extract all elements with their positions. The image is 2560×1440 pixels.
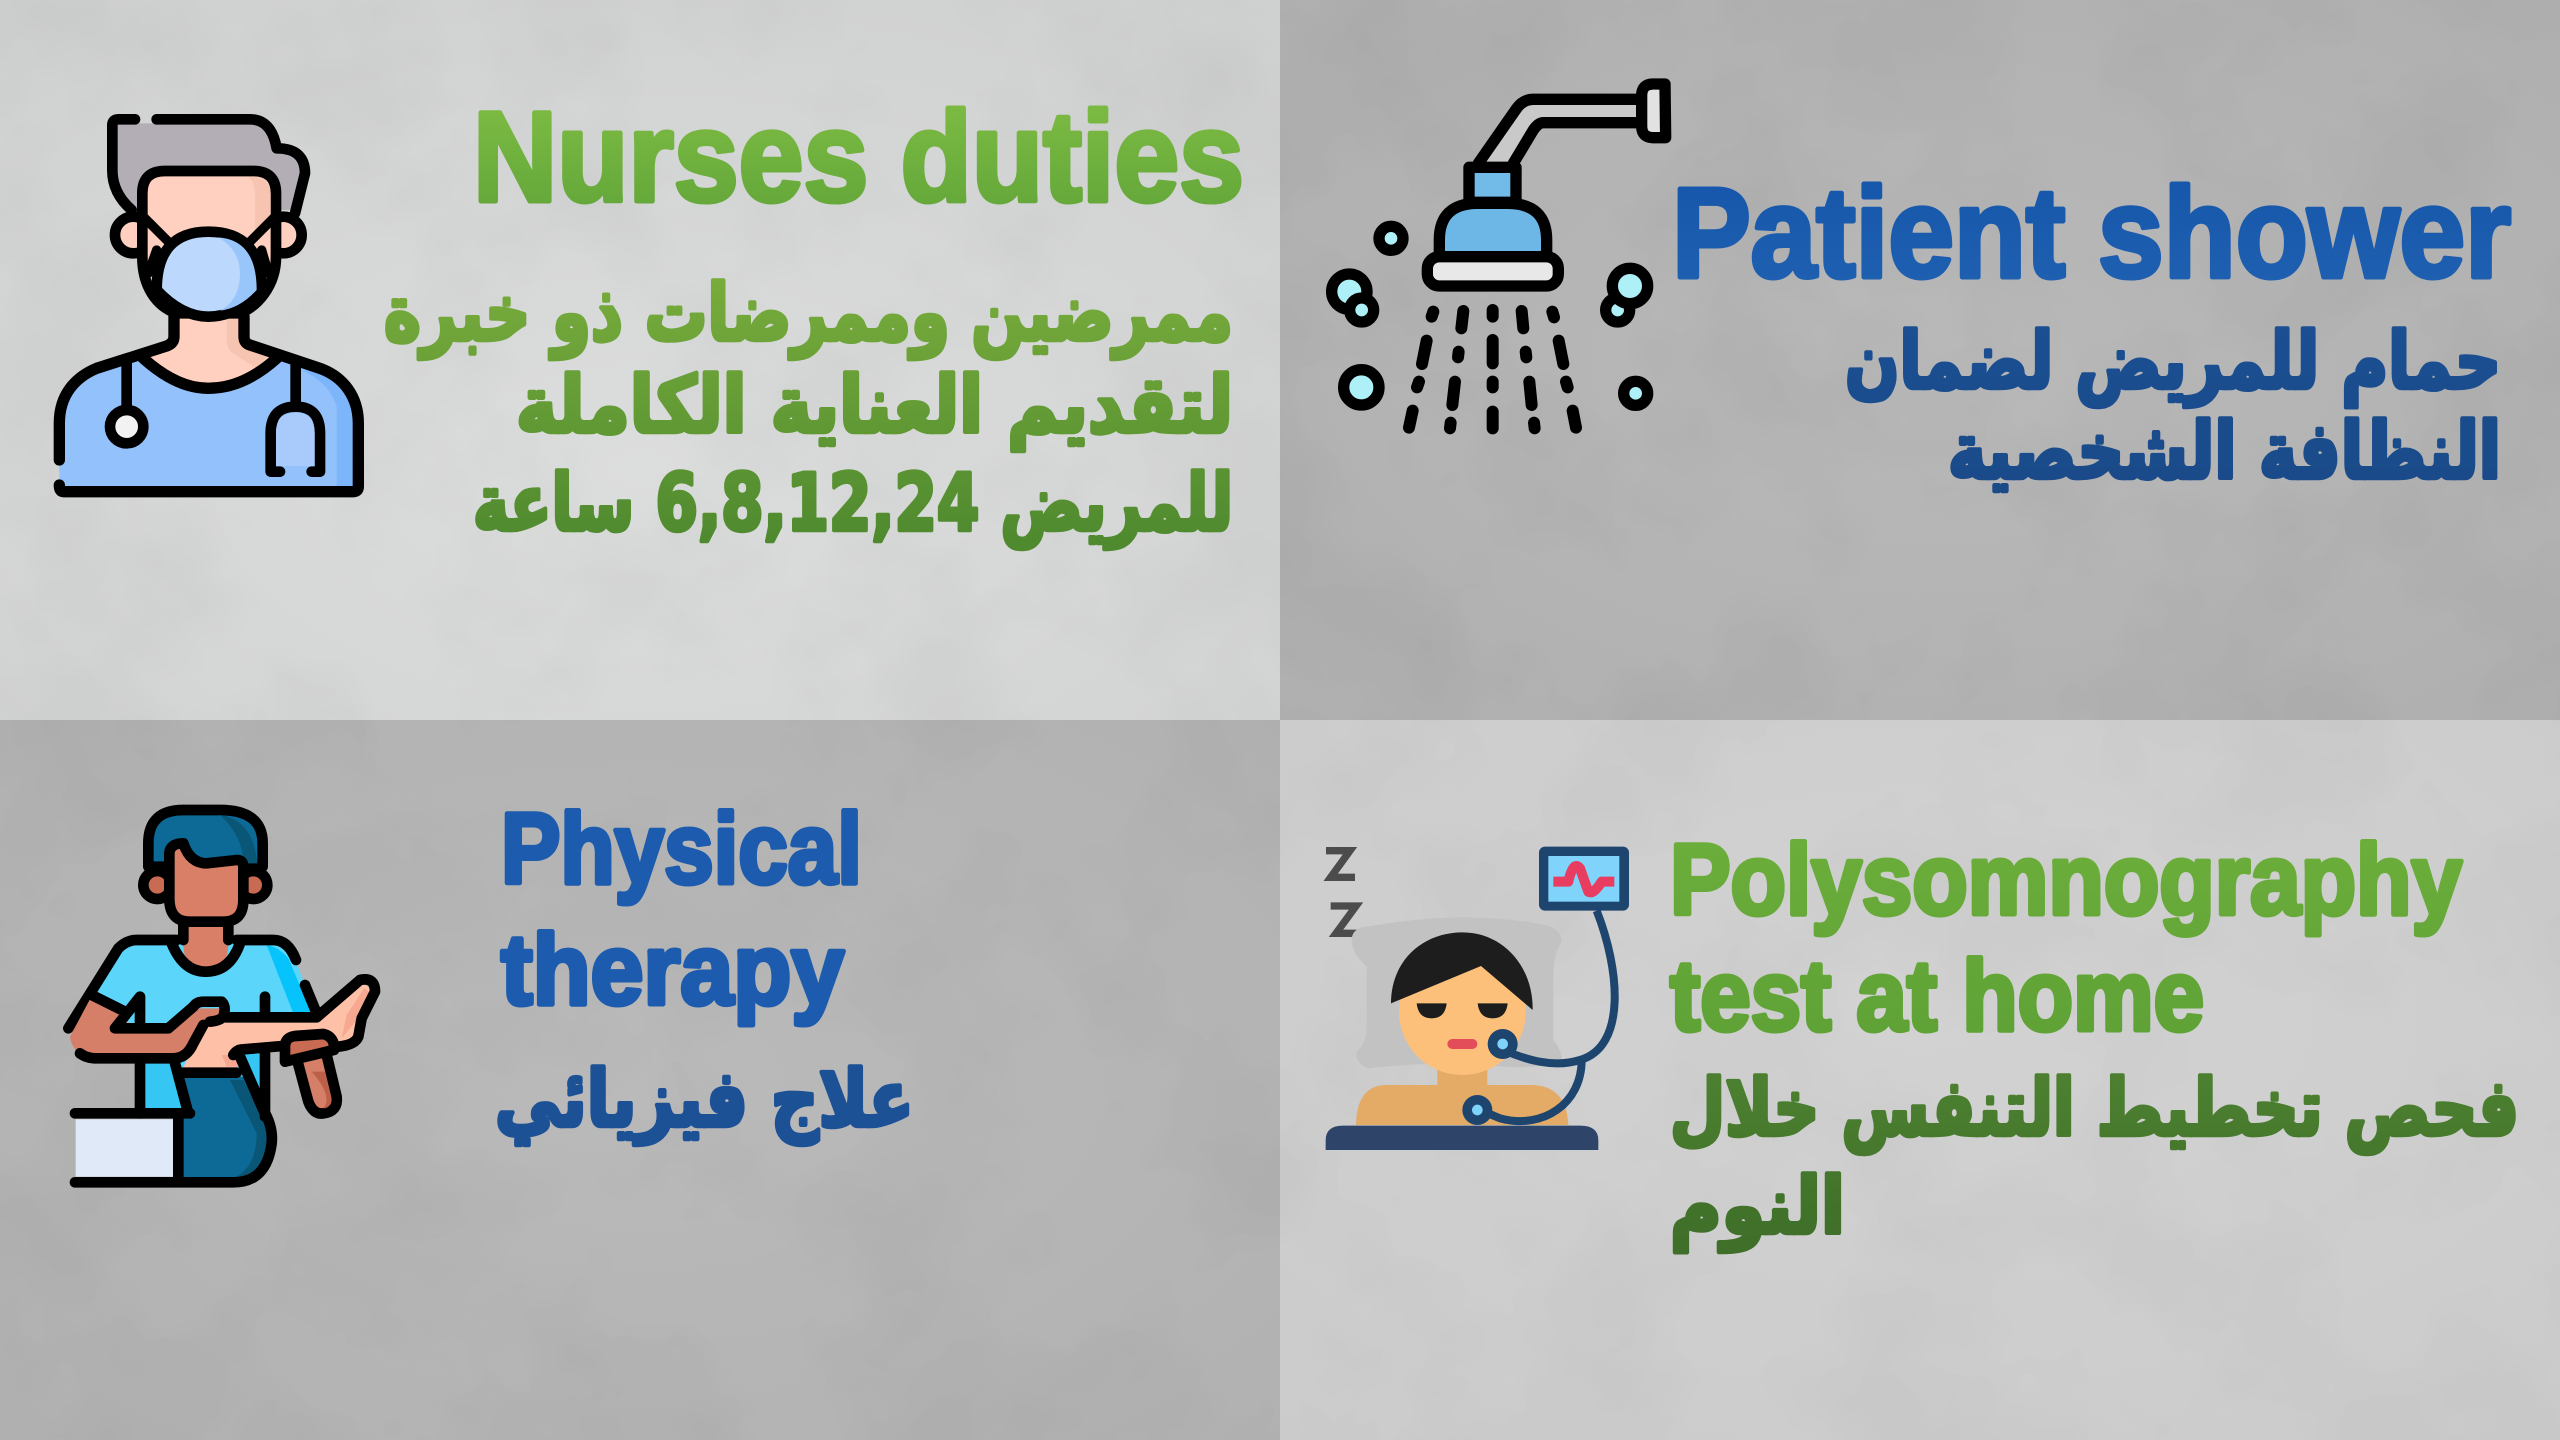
heading: Polysomnography test at home bbox=[1670, 824, 2462, 1052]
heading: Polysomnography test at home: test at home bbox=[1670, 940, 2204, 1052]
panel: patient shower bbox=[1280, 0, 2560, 720]
text block: nurses description: ممرضين وممرضات ذو خبرة bbox=[384, 269, 1233, 359]
text block: polysomnography description bbox=[1670, 1064, 2519, 1252]
icon: shower head bbox=[1332, 84, 1666, 428]
icon: sleeping patient with monitor bbox=[1326, 847, 1629, 1150]
text block: therapy description: علاج فيزيائي bbox=[495, 1055, 914, 1145]
panel: polysomnography bbox=[1280, 720, 2560, 1440]
heading: Patient shower: Patient shower bbox=[1672, 162, 2511, 305]
heading: Polysomnography test at home: Polysomnography bbox=[1670, 824, 2462, 936]
heading: Physical therapy: Physical bbox=[501, 793, 862, 905]
heading: Nurses duties: Nurses duties bbox=[473, 86, 1244, 229]
text block: nurses description: لتقديم العناية الكاملة bbox=[516, 361, 1233, 451]
text block: nurses description bbox=[384, 269, 1233, 549]
panel: physical therapy bbox=[0, 720, 1280, 1440]
text block: nurses description: للمريض 6,8,12,24 ساعة bbox=[473, 459, 1233, 549]
panel: nurses duties bbox=[0, 0, 1280, 720]
icon: nurse with mask bbox=[59, 119, 358, 492]
text block: shower description bbox=[1845, 317, 2501, 497]
heading: Physical therapy bbox=[501, 793, 862, 1026]
icon: physiotherapist with patient leg bbox=[68, 810, 375, 1182]
heading: Physical therapy: therapy bbox=[501, 914, 844, 1026]
text block: polysomnography description: النوم bbox=[1670, 1162, 1845, 1252]
